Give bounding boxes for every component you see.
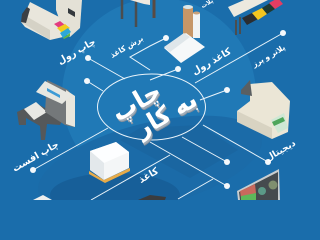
central title: به کار bbox=[131, 88, 203, 145]
label: offset printing: چاپ افست bbox=[11, 139, 61, 175]
icon: offset press bbox=[17, 80, 75, 140]
icon: paper rolls bbox=[164, 5, 205, 63]
central title bbox=[107, 77, 204, 146]
label: paper cutter: برش کاغذ bbox=[109, 34, 145, 60]
icon: digital printer bbox=[237, 80, 290, 139]
icon: paper cutter bbox=[122, 0, 154, 27]
icon: monitor panel bbox=[237, 169, 280, 200]
icon: roll printer bbox=[21, 0, 82, 40]
icon: paper pallet bbox=[89, 142, 130, 183]
label: plotter: پلاتر و پرز bbox=[250, 43, 287, 69]
central title: چاپ bbox=[108, 79, 168, 130]
central title: چاپ bbox=[107, 77, 166, 127]
connector lines bbox=[33, 33, 283, 200]
icon: bottom machine bbox=[33, 195, 166, 200]
central title: به کار bbox=[131, 89, 204, 146]
label: paper: کاغذ bbox=[137, 166, 161, 186]
infographic canvas bbox=[11, 0, 298, 200]
central title: چاپ bbox=[108, 79, 167, 129]
icon: wide format plotter bbox=[228, 0, 283, 35]
label: paper roll: کاغذ رول bbox=[190, 46, 234, 77]
label: roll printing: چاپ رول bbox=[56, 37, 98, 67]
label: digital: دیجیتال bbox=[264, 138, 298, 163]
central title: به کار bbox=[130, 86, 202, 143]
